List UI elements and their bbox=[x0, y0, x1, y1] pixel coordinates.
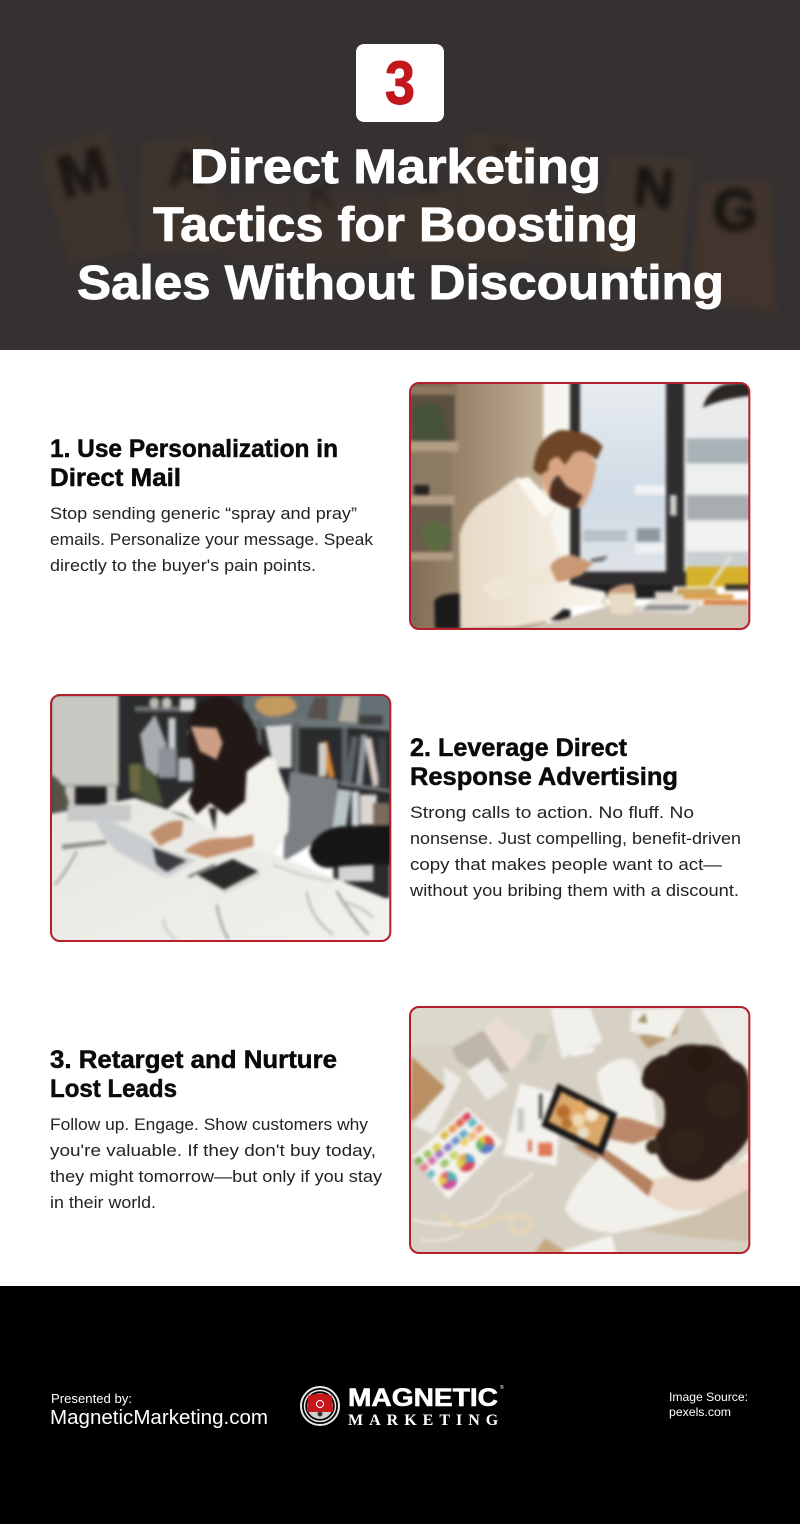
heading: tactic 1 bbox=[50, 435, 338, 492]
box bbox=[410, 1057, 445, 1120]
text: tactic 2 body bbox=[409, 803, 741, 900]
papers on floor bbox=[452, 1030, 510, 1072]
text: tactic 3 body bbox=[50, 1115, 383, 1212]
text: tactic 1 body: directly to the buyer's pain points. bbox=[50, 556, 316, 575]
text: tactic 2 body: Strong calls to action. No fluff. No bbox=[410, 803, 694, 822]
document bbox=[503, 1083, 562, 1166]
laptop bbox=[96, 820, 166, 878]
shelves bbox=[410, 383, 455, 443]
heading: tactic 1: Direct Mail bbox=[50, 464, 181, 492]
heading: tactic 3 bbox=[50, 1046, 337, 1103]
heading: tactic 2 bbox=[410, 734, 678, 791]
hair bbox=[642, 1044, 749, 1180]
text: image source bbox=[669, 1390, 748, 1419]
text: tactic 2 body: without you bribing them with a discount. bbox=[409, 881, 739, 900]
text: presented by: Presented by: bbox=[51, 1391, 132, 1406]
title bbox=[77, 141, 724, 310]
number badge bbox=[356, 44, 444, 122]
logo: Magnetic Marketing: MARKETING bbox=[348, 1412, 504, 1429]
table bbox=[527, 602, 748, 628]
background photo: wooden marketing blocks: E bbox=[421, 168, 439, 198]
title: Tactics for Boosting bbox=[153, 199, 638, 252]
footer bbox=[0, 1286, 800, 1524]
head bbox=[540, 442, 597, 508]
colour chart bbox=[413, 1107, 503, 1199]
background photo: wooden marketing blocks: G bbox=[712, 178, 758, 243]
photo: man at desk with phone bbox=[407, 380, 753, 633]
text: tactic 1 body: Stop sending generic “spray and pray” bbox=[50, 504, 357, 523]
background photo: wooden marketing blocks: N bbox=[631, 154, 677, 221]
text: presented by bbox=[50, 1391, 268, 1429]
text: tactic 1 body: emails. Personalize your message. Speak bbox=[50, 530, 374, 549]
notebook bbox=[200, 872, 260, 894]
text: tactic 2 body: nonsense. Just compelling, benefit-driven bbox=[410, 829, 741, 848]
logo: Magnetic Marketing: MAGNETIC bbox=[348, 1384, 498, 1412]
text: tactic 3 body: in their world. bbox=[50, 1193, 156, 1212]
heading: tactic 2: 2. Leverage Direct bbox=[410, 734, 628, 762]
number badge: 3 bbox=[385, 49, 415, 117]
heading: tactic 3: 3. Retarget and Nurture bbox=[50, 1046, 337, 1074]
background photo: wooden marketing blocks: A bbox=[168, 141, 204, 197]
text: tactic 3 body: they might tomorrow—but only if you stay bbox=[50, 1167, 383, 1186]
photo border bbox=[410, 1007, 749, 1253]
cup bbox=[608, 593, 636, 614]
photo border bbox=[410, 383, 749, 629]
background photo: wooden marketing blocks: K bbox=[308, 175, 336, 217]
icon: magnet rings bbox=[301, 1387, 339, 1425]
text: tactic 3 body: Follow up. Engage. Show customers why bbox=[50, 1115, 369, 1134]
woman body bbox=[565, 1059, 749, 1233]
dark right chair and floor bbox=[333, 861, 390, 898]
header banner bbox=[0, 0, 800, 350]
background photo: wooden marketing blocks bbox=[38, 130, 776, 312]
logo: Magnetic Marketing bbox=[301, 1384, 504, 1429]
background photo: wooden marketing blocks: T bbox=[490, 139, 510, 175]
tablet bbox=[541, 1083, 617, 1156]
panel: tactic 3 bbox=[50, 1003, 753, 1257]
table bbox=[47, 798, 393, 948]
photo: woman with tablet and colour swatches bbox=[407, 1003, 753, 1257]
logo: Magnetic Marketing: ® bbox=[500, 1384, 504, 1391]
text: image source: Image Source: bbox=[669, 1390, 748, 1404]
woman bbox=[167, 748, 289, 855]
hands bbox=[603, 1117, 662, 1144]
bottom items bbox=[533, 1238, 563, 1255]
text: image source: pexels.com bbox=[669, 1405, 731, 1419]
text: tactic 3 body: you're valuable. If they don't buy today, bbox=[50, 1141, 376, 1160]
panel: tactic 2 bbox=[47, 691, 741, 948]
shirt bbox=[459, 477, 608, 629]
title: Sales Without Discounting bbox=[77, 257, 724, 310]
heading: tactic 2: Response Advertising bbox=[410, 763, 678, 791]
heading: tactic 1: 1. Use Personalization in bbox=[50, 435, 338, 463]
text: presented by: MagneticMarketing.com bbox=[50, 1407, 268, 1429]
title: Direct Marketing bbox=[190, 141, 601, 194]
photo border bbox=[51, 695, 390, 941]
panel: tactic 1 bbox=[50, 380, 753, 633]
hand and phone bbox=[550, 555, 593, 582]
papers bbox=[655, 592, 685, 598]
chair bbox=[434, 593, 463, 629]
laptop bbox=[635, 598, 702, 613]
photo: woman typing on laptop bbox=[47, 691, 393, 948]
shelves and books bbox=[135, 706, 192, 712]
heading: tactic 3: Lost Leads bbox=[50, 1075, 177, 1103]
ribbon bbox=[413, 1173, 533, 1224]
text: tactic 1 body bbox=[50, 504, 374, 575]
background photo: wooden marketing blocks: M bbox=[50, 134, 116, 211]
text: tactic 2 body: copy that makes people want to act— bbox=[410, 855, 722, 874]
